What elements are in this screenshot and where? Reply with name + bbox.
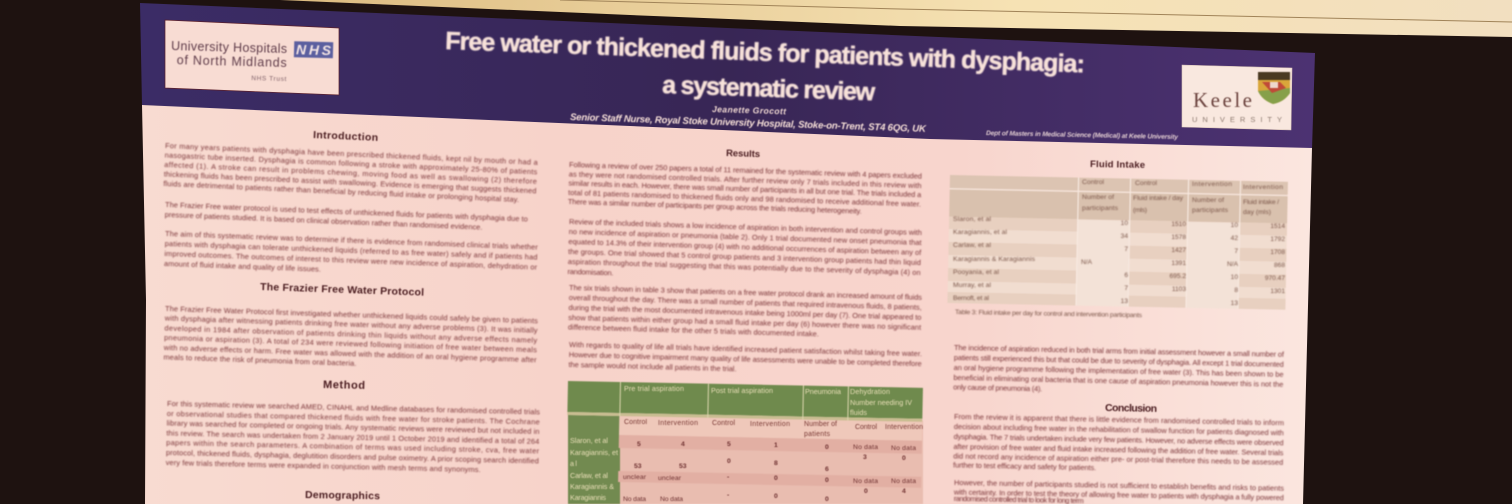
fluid table header: Control xyxy=(1082,179,1104,186)
table values: 5 xyxy=(727,441,731,448)
table row labels: Slaron, et al xyxy=(570,436,608,445)
logo: Keele University: UNIVERSITY xyxy=(1192,115,1282,124)
author and affiliation xyxy=(570,104,1178,141)
table values: 8 xyxy=(774,460,778,467)
table subheader row: Control xyxy=(855,424,877,431)
heading: Conclusion: Conclusion xyxy=(1105,402,1157,415)
icon: Keele crest shield xyxy=(1258,72,1290,104)
text: discussion paragraph: an oral hygiene programme following the implementation of free water (3). This has been shown to be xyxy=(954,363,1284,379)
text: introduction paragraph 2: pressure of patients studied. It is based on clinical observation rather than randomised evidence. xyxy=(165,210,483,232)
text: method description: For this systematic review we searched AMED, CINAHL and Medline databases for randomised controlled trials xyxy=(167,399,540,416)
fluid table header: Number of xyxy=(1082,194,1114,201)
text: results paragraph 3: show that patients within either group had a small fluid intake per day (6) however there was no significant xyxy=(568,313,921,332)
table row labels xyxy=(570,436,618,502)
text: results paragraph 2: no new incidence of aspiration or pneumonia (table 2). Only 1 trial documented new onset pneumonia that xyxy=(569,227,922,247)
text: results paragraph 2: randomisation. xyxy=(567,267,614,277)
table row labels: Karagiannis, et xyxy=(570,448,618,457)
logo: Keele University: Keele xyxy=(1193,88,1252,112)
fluid table values xyxy=(1081,220,1285,307)
fluid table header: participants xyxy=(1192,207,1229,214)
table subheader row xyxy=(624,419,923,438)
table values: 4 xyxy=(681,441,685,448)
text: introduction paragraph 1: thickening fluids has been prescribed to assist with swallowing. Evidence is emerging that suggests thickened xyxy=(164,169,537,195)
logo: Keele University xyxy=(1182,65,1292,130)
text: conclusion paragraph 2: However, the number of participants studied is not sufficient to establish benefits and risks to patients xyxy=(954,478,1284,493)
fluid table values: 1427 xyxy=(1171,247,1186,254)
fluid table row labels: Pooyania, et al xyxy=(953,269,999,276)
text: results paragraph 1: as they were not randomised controlled trials. After further review only 7 trials included in this review with xyxy=(569,169,922,190)
fluid table header: Intervention xyxy=(1243,184,1283,191)
table values: 4 xyxy=(902,488,906,495)
table values: 1 xyxy=(774,442,778,449)
logo: University Hospitals of North Midlands NHS: NHS Trust xyxy=(251,75,287,83)
table header row: Post trial aspiration xyxy=(711,386,773,395)
author and affiliation: Dept of Masters in Medical Science (Medical) at Keele University xyxy=(986,130,1178,141)
table values: No data xyxy=(891,445,916,452)
text: results paragraph 2 xyxy=(567,217,923,287)
table values: - xyxy=(727,492,729,499)
text: results paragraph 3: difference between fluid intake for the other 5 trials with documented intake. xyxy=(568,323,819,339)
text: method description: or observational studies that compared thickened fluids with free water for stroke patients. The Cochrane xyxy=(167,409,540,426)
text: discussion paragraph: The incidence of aspiration reduced in both trial arms from initial assessment however a small number of xyxy=(954,343,1285,359)
fluid table values: 10 xyxy=(1231,274,1238,281)
text: results paragraph 4: the sample would not include all patients in the trial. xyxy=(568,360,737,373)
text: results paragraph 2: equated to 14.3% of their intervention group (4) with no additional occurrences of aspiration between any of xyxy=(568,237,922,257)
table header row: Pre trial aspiration xyxy=(624,384,684,393)
title xyxy=(445,27,1085,106)
fluid table header: Fluid intake / day xyxy=(1133,195,1184,202)
text: conclusion paragraph 1: dysphagia. The 7 trials undertaken include very few patients. However, no adverse effects were observed xyxy=(954,432,1284,447)
text: results paragraph 3: overall throughout the day. There was a small number of patients that required intravenous fluids, 8 patients, xyxy=(569,293,922,312)
author and affiliation: Senior Staff Nurse, Royal Stoke University Hospital, Stoke-on-Trent, ST4 6QG, UK xyxy=(570,112,927,135)
text: introduction paragraph 1 xyxy=(163,141,539,205)
text: conclusion paragraph 2: with certainty. In order to test the theory of allowing free water to patients with dysphagia a fully powered xyxy=(953,487,1284,502)
text: introduction paragraph 1: For many years patients with dysphagia have been prescribed thickened fluids, kept nil by mouth or had a xyxy=(165,141,539,167)
text: discussion paragraph: beneficial in eliminating oral bacteria that is one cause of aspiration pneumonia however this is not the xyxy=(953,373,1283,389)
text: conclusion paragraph 2 xyxy=(953,478,1284,504)
table values: 6 xyxy=(825,466,829,473)
table header row: Pneumonia xyxy=(805,387,841,396)
fluid table header: Fluid intake / xyxy=(1243,199,1279,206)
fluid table values: 1792 xyxy=(1270,236,1285,243)
text: results paragraph 3: during the trial with the most documented intravenous intake being 1000ml per day (7). One trial appeared to xyxy=(568,303,921,322)
fluid table values: 868 xyxy=(1274,262,1285,269)
text: conclusion paragraph 1 xyxy=(953,412,1284,476)
table row labels: Karagiannis xyxy=(570,493,606,502)
table values: 0 xyxy=(774,493,778,500)
text: Frazier protocol description: meals to reduce the risk of pneumonia from oral bacteria. xyxy=(163,352,357,368)
table row labels: al xyxy=(570,459,577,468)
fluid table values: 10 xyxy=(1121,220,1128,227)
table row labels: Carlaw, et al xyxy=(570,471,608,480)
text: method description xyxy=(166,399,541,475)
fluid table header: Intervention xyxy=(1192,181,1232,188)
table caption: Table 3: Fluid intake per day for control and intervention participants xyxy=(955,309,1143,319)
table values: 0 xyxy=(825,477,829,484)
text: introduction paragraph 3: amount of fluid intake and quality of life issues. xyxy=(164,259,321,274)
column: left xyxy=(162,129,541,502)
table row labels: Karagiannis & xyxy=(570,482,614,491)
table subheader row: Control xyxy=(624,419,647,426)
fluid table values: 1578 xyxy=(1171,234,1186,241)
fluid table row labels: Carlaw, et al xyxy=(953,242,991,249)
text: Frazier protocol description: with no adverse effects or harm. Free water was allowed with the addition of an oral hygiene programme after xyxy=(163,343,537,364)
table subheader row: Control xyxy=(712,420,735,427)
table values: 0 xyxy=(825,496,829,503)
text: conclusion paragraph 1: decision about including free water in the rehabilitation of swallow function for patients diagnosed with xyxy=(954,422,1284,437)
fluid table values: 10 xyxy=(1231,222,1238,229)
text: results paragraph 3 xyxy=(568,283,922,341)
fluid table header: (mls) xyxy=(1133,207,1147,214)
text: results paragraph 1: Following a review of over 250 papers a total of 11 remained for the systematic review with 4 papers excluded xyxy=(569,160,922,181)
fluid table values: 34 xyxy=(1121,233,1128,240)
column: results xyxy=(566,148,923,504)
poster body panel xyxy=(142,105,1312,504)
fluid table row labels: Slaron, et al xyxy=(953,216,991,223)
text: introduction paragraph 3: The aim of this systematic review was to determine if there is evidence from randomised clinical trials whether xyxy=(165,229,539,252)
text: Frazier protocol description: pneumonia or aspiration (3). A total of 234 were reviewed following initiation of free water between meals xyxy=(164,333,537,354)
fluid table values: 13 xyxy=(1231,300,1238,307)
table values: No data xyxy=(891,478,916,485)
text: results paragraph 4 xyxy=(568,340,922,378)
table values: 53 xyxy=(679,463,687,470)
fluid table values: 1510 xyxy=(1171,221,1186,228)
table values: 0 xyxy=(864,488,868,495)
table subheader row: Intervention xyxy=(885,424,923,431)
text: conclusion paragraph 1: did not record any incidence of aspiration either pre- or post-trial therefore this needs to be assessed xyxy=(953,451,1283,467)
table: fluid intake per day xyxy=(947,175,1288,310)
text: introduction paragraph 3: patients with dysphagia can tolerate unthickened liquids (referred to as free water) safely and if patients had xyxy=(165,239,538,262)
text: results paragraph 1: similar results in each. However, there was small number of participants in all but one trial. The trials included a xyxy=(568,179,922,199)
text: results paragraph 4: With regards to quality of life all trials have identified increased patient satisfaction whilst taking free water. xyxy=(569,340,922,358)
text: introduction paragraph 1: nasogastric tube inserted. Dysphagia is common following a stroke with approximately 25-80% of patients xyxy=(164,150,538,176)
fluid table row labels xyxy=(953,216,1036,302)
text: results paragraph 1: total of 81 patients randomised to thickened fluids only and 98 randomised to receive additional free water. xyxy=(568,188,921,209)
text: Frazier protocol description: with dysphagia after witnessing patients drinking free water without any adverse problems (3). It was initially xyxy=(164,314,538,335)
heading: Results: Results xyxy=(726,148,760,160)
table values: - xyxy=(727,474,729,481)
text: discussion paragraph: only cause of pneumonia (4). xyxy=(953,382,1042,393)
table values: 3 xyxy=(863,454,867,461)
text: results paragraph 1 xyxy=(568,160,923,218)
heading: Method: Method xyxy=(323,379,365,392)
fluid table header: Number of xyxy=(1192,197,1224,204)
text: results paragraph 2: aspiration throughout the trial suggesting that this was potentially due to the severity of dysphagia (4) on xyxy=(568,257,921,277)
text: conclusion paragraph 1: From the review it is apparent that there is little evidence from randomised controlled trials to inform xyxy=(954,412,1284,427)
fluid table header: Control xyxy=(1135,180,1157,187)
text: method description: very few trials therefore terms were expanded in conjunction with mesh terms and synonyms. xyxy=(166,458,481,474)
table: aspiration, pneumonia and dehydration outcomes xyxy=(566,381,923,504)
text: introduction paragraph 2: The Frazier Free water protocol is used to test effects of unthickened fluids for patients with dysphagia due to xyxy=(165,200,528,224)
text: method description: this review. The search was undertaken from 2 January 2019 until 1 October 2019 and identified a total of 264 xyxy=(166,428,539,446)
fluid table values: N/A xyxy=(1081,259,1093,266)
table subheader row: Number of xyxy=(804,421,837,428)
text: Frazier protocol description: developed in 1984 after observation of patients drinking thin liquids without any adverse effects namely xyxy=(164,323,538,345)
fluid table values: 7 xyxy=(1124,285,1128,292)
fluid table values: 13 xyxy=(1121,298,1128,305)
text: conclusion paragraph 1: after provision of free water and fluid intake increased following the addition of free water. Several trials xyxy=(953,442,1284,457)
text: introduction paragraph 1: affected (1). A stroke can result in problems chewing, moving food as well as swallowing (2) therefore xyxy=(164,160,537,186)
table values: unclear xyxy=(623,474,647,481)
fluid table header: participants xyxy=(1082,205,1119,212)
title: Free water or thickened fluids for patients with dysphagia: xyxy=(445,27,1085,78)
text: discussion paragraph xyxy=(953,343,1285,398)
table subheader row: Intervention xyxy=(658,420,698,427)
logo: University Hospitals of North Midlands NHS: University Hospitals xyxy=(171,39,287,56)
text: method description: library was searched for completed or ongoing trials. Any systematic reviews were reviewed but not included in xyxy=(167,419,540,436)
text: method description: protocol, thickened fluids, dysphagia, deglutition disorders and pulse oximetry. A prior scoping search identified xyxy=(166,448,539,465)
title: a systematic review xyxy=(662,71,876,106)
table values: 5 xyxy=(637,441,641,448)
text: results paragraph 3: The six trials shown in table 3 show that patients on a free water protocol drank an increased amount of fluids xyxy=(569,283,922,302)
fluid table values: 1514 xyxy=(1270,223,1285,230)
poster header band xyxy=(140,3,1315,149)
fluid table values: N/A xyxy=(1227,261,1239,268)
table header row: Number needing IV xyxy=(850,398,912,407)
table values: No data xyxy=(660,496,683,503)
text: introduction paragraph 1: fluids are detrimental to patients rather than beneficial by reducing fluid intake or prolonging hospital stay. xyxy=(163,179,519,204)
fluid table values: 695.2 xyxy=(1169,273,1186,280)
table header row xyxy=(624,384,912,417)
text: results paragraph 4: However due to cognitive impairment many quality of life assessments were unable to be completed therefore xyxy=(569,350,922,368)
heading: The Frazier Free Water Protocol: The Frazier Free Water Protocol xyxy=(260,281,424,299)
table values xyxy=(623,441,916,503)
fluid table row labels: Bernoft, et al xyxy=(953,295,989,302)
table subheader row: patients xyxy=(804,431,830,438)
author and affiliation: Jeanette Grocott xyxy=(712,104,787,116)
fluid table values: 1708 xyxy=(1270,249,1285,256)
logo: University Hospitals of North Midlands NHS: of North Midlands xyxy=(177,53,287,70)
text: Frazier protocol description: The Frazier Free Water Protocol first investigated whether unthickened liquids could safely be given to patients xyxy=(165,304,538,325)
text: Frazier protocol description xyxy=(162,304,539,374)
text: discussion paragraph: patients still experienced this but that could be due to severity of dysphagia. All except 1 trial documented xyxy=(954,353,1284,369)
text: results paragraph 1: There was a similar number of participants per group across the trials reducing heterogeneity. xyxy=(568,197,862,216)
text: introduction paragraph 3: improved outcomes. The outcomes of interest to this review were new incidence of aspiration, dehydration or xyxy=(164,249,538,272)
text: introduction paragraph 3 xyxy=(164,229,539,282)
text: method description: papers within the search parameters. A combination of terms was used including stroke, cva, free water xyxy=(166,438,540,456)
text: conclusion paragraph 1: further to test efficacy and safety for patients. xyxy=(953,460,1096,472)
text: results paragraph 2: the groups. One trial showed that 5 control group patients and 3 intervention group patients had thin liquid xyxy=(568,247,921,267)
table values: 0 xyxy=(825,444,829,451)
table header row: Dehydration xyxy=(850,387,890,396)
fluid table values: 1103 xyxy=(1172,286,1186,293)
table values: No data xyxy=(853,478,878,485)
logo: University Hospitals of North Midlands NHS xyxy=(165,20,339,95)
fluid table header xyxy=(1082,179,1283,216)
heading: Introduction: Introduction xyxy=(313,129,378,144)
column: right xyxy=(947,159,1288,504)
table values: No data xyxy=(853,444,878,451)
fluid table values: 8 xyxy=(1234,287,1238,294)
picture rail strip xyxy=(280,0,1512,37)
fluid table row labels: Murray, et al xyxy=(953,282,991,289)
table values: 0 xyxy=(774,475,778,482)
fluid table values: 42 xyxy=(1231,235,1238,242)
fluid table values: 970.47 xyxy=(1265,275,1285,282)
table values: 53 xyxy=(634,463,642,470)
fluid table values: 6 xyxy=(1124,272,1128,279)
fluid table row labels: Karagiannis, et al xyxy=(953,229,1007,236)
fluid table values: 7 xyxy=(1124,246,1128,253)
table values: 0 xyxy=(902,455,906,462)
table values: unclear xyxy=(658,475,682,482)
table values: 0 xyxy=(727,458,731,465)
text: results paragraph 2: Review of the included trials shows a low incidence of aspiration in both intervention and control groups with xyxy=(569,217,922,237)
logo: University Hospitals of North Midlands NHS: NHS xyxy=(296,41,332,58)
fluid table values: 1301 xyxy=(1270,288,1285,295)
fluid table row labels: Karagiannis & Karagiannis xyxy=(953,256,1036,263)
fluid table values: 7 xyxy=(1234,248,1238,255)
table values: No data xyxy=(623,496,646,503)
table header row: fluids xyxy=(850,408,867,417)
table subheader row: Intervention xyxy=(750,421,790,428)
heading: Demographics: Demographics xyxy=(305,489,380,502)
heading: Fluid Intake: Fluid Intake xyxy=(1090,159,1145,171)
fluid table values: 1391 xyxy=(1171,260,1186,267)
fluid table header: day (mls) xyxy=(1243,209,1271,216)
